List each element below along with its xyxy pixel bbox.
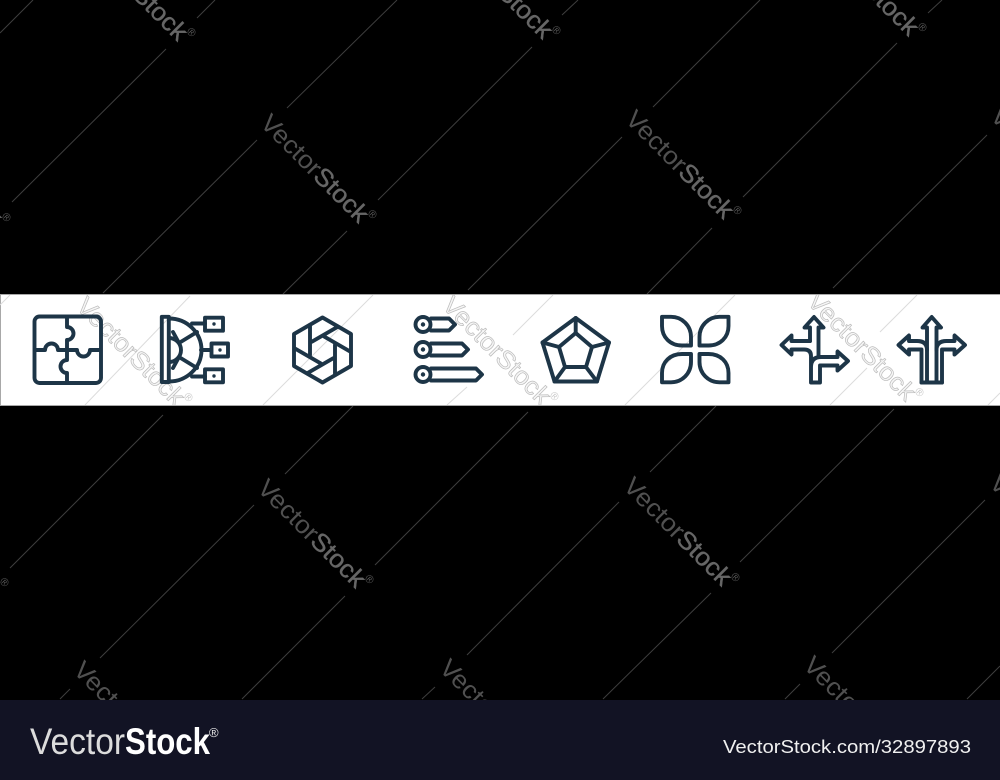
icon: hexagon aperture <box>294 318 351 382</box>
band watermark 1: ® <box>181 391 195 405</box>
band watermark 3: VectorStock <box>802 287 922 407</box>
icon: four leaves <box>662 317 728 382</box>
white icon band <box>0 294 1000 406</box>
watermark bottom row 3: VectorStock <box>798 651 918 771</box>
watermark left edge <box>0 112 13 232</box>
icon: list of tags <box>416 317 482 382</box>
band watermark 2: VectorStock <box>437 291 557 411</box>
band watermark 2: ® <box>547 390 561 404</box>
watermark upper row 1: VectorStock <box>255 109 375 229</box>
image id: VectorStock.com/32897893 <box>723 736 971 757</box>
watermark upper row 2: ® <box>730 204 744 218</box>
logo bold part: Stock <box>125 721 210 762</box>
watermark lower row 1: VectorStock <box>252 474 372 594</box>
registered mark: ® <box>209 725 219 740</box>
logo: Vector <box>30 721 125 762</box>
watermark upper row 2: VectorStock <box>620 105 740 225</box>
watermark bottom row 1: VectorStock <box>68 656 188 776</box>
icon: crossroad arrows <box>782 317 848 382</box>
watermark top row 3 <box>805 0 929 42</box>
watermark lower row 2: VectorStock <box>618 472 738 592</box>
watermark upper row 1: ® <box>365 208 379 222</box>
watermark bottom row 2: VectorStock <box>434 654 554 774</box>
watermark top row 2 <box>439 0 563 45</box>
icon: three-way arrows <box>898 317 965 382</box>
band watermark 1: VectorStock <box>71 292 191 412</box>
icon: radial diagram <box>162 317 228 382</box>
watermark lower row 1: ® <box>362 573 376 587</box>
watermark top row 2: ® <box>549 24 563 38</box>
icon: pentagon <box>542 318 609 382</box>
watermark top row 1: ® <box>184 26 198 40</box>
watermark lower row 2: ® <box>728 571 742 585</box>
footer bar <box>0 700 1000 780</box>
watermark top row 1 <box>74 0 198 47</box>
watermark lower left edge <box>0 477 11 597</box>
band watermark 3: ® <box>912 386 926 400</box>
watermark top row 3: ® <box>915 21 929 35</box>
icon: puzzle <box>34 316 101 383</box>
